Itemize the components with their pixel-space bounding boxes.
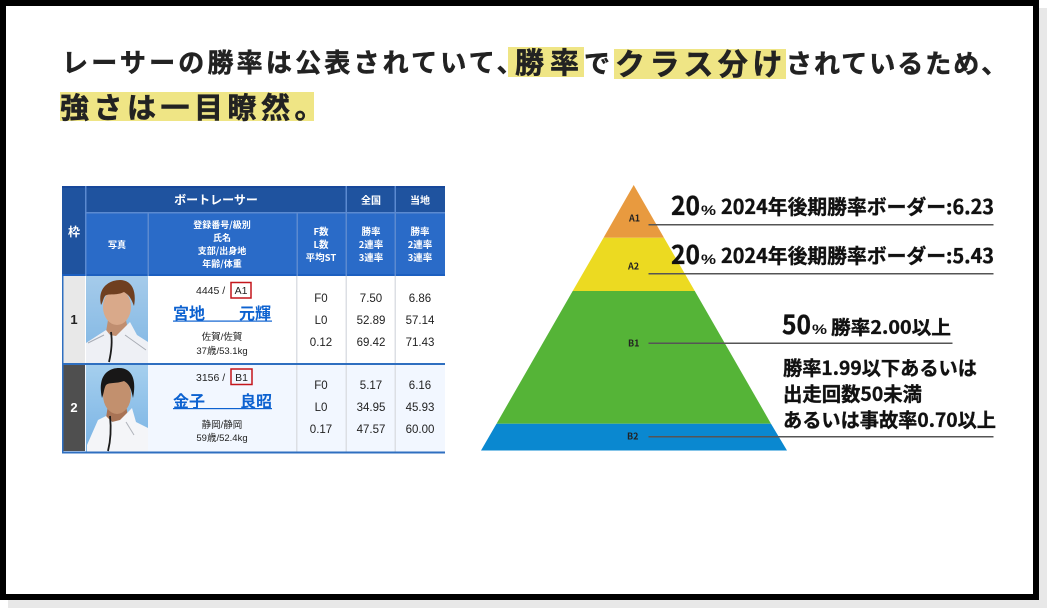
table header: 年齢/体重 xyxy=(202,257,242,270)
racer info 2 xyxy=(173,369,272,444)
title: で xyxy=(584,44,610,81)
row 2 stats: 6.16 xyxy=(409,380,431,392)
label: A1: 2024年後期勝率ボーダー:6.23 xyxy=(721,191,994,220)
row 2 stats xyxy=(310,380,434,436)
table header: 枠 xyxy=(68,223,80,240)
racer info 2: 59歳/52.4kg xyxy=(196,432,248,444)
label: A2: 2024年後期勝率ボーダー:5.43 xyxy=(721,240,994,269)
label: A1: % xyxy=(701,202,717,218)
row 2 stats: 0.17 xyxy=(310,424,332,436)
racer info 1: 4445 / xyxy=(196,285,225,297)
row 2 stats: L0 xyxy=(315,402,327,414)
table header: 2連率 xyxy=(359,237,384,251)
label: B2: 出走回数50未満 xyxy=(783,378,922,407)
row 2 stats: 34.95 xyxy=(357,402,385,414)
row 2 stats: 45.93 xyxy=(406,402,434,414)
title xyxy=(60,40,1009,127)
row 2 stats: F0 xyxy=(314,380,328,392)
row 2 stats: 5.17 xyxy=(360,380,382,392)
row 1 stats: F0 xyxy=(314,293,328,305)
row 2 stats: 60.00 xyxy=(406,424,434,436)
tier labels: A2 xyxy=(627,260,639,272)
table header: 当地 xyxy=(410,192,430,207)
leader lines xyxy=(648,224,994,438)
table header: 3連率 xyxy=(359,250,384,264)
label: B1: 50 xyxy=(782,305,811,342)
racer info 2: B1 xyxy=(235,372,248,384)
table header: 2連率 xyxy=(408,237,433,251)
class pyramid xyxy=(481,185,787,450)
table header: 氏名 xyxy=(213,231,231,244)
racer info 1: A1 xyxy=(235,285,248,297)
row 1 stats: 71.43 xyxy=(406,337,434,349)
row 1 stats: L0 xyxy=(315,315,327,327)
race table xyxy=(62,186,445,454)
table header: 勝率 xyxy=(410,224,430,238)
table header: 支部/出身地 xyxy=(198,244,246,257)
table header: L数 xyxy=(314,237,329,251)
racer info 1: 37歳/53.1kg xyxy=(196,345,248,357)
row 1 stats: 57.14 xyxy=(406,315,435,327)
table header xyxy=(62,186,445,276)
row 1 stats: 0.12 xyxy=(310,337,332,349)
tier B2 xyxy=(481,424,787,450)
label: A1 xyxy=(671,186,994,223)
title: クラス分け xyxy=(615,40,787,84)
racer info 2: 3156 / xyxy=(196,372,225,384)
label: A2: 20 xyxy=(671,235,700,272)
title: レーサーの勝率は公表されていて、 xyxy=(62,43,526,80)
row 1 xyxy=(62,276,445,363)
tier A1 xyxy=(604,185,664,238)
table header: 平均ST xyxy=(306,250,336,264)
row 2: 2 xyxy=(70,400,78,415)
label: B1 xyxy=(782,305,951,342)
label: A2: % xyxy=(701,251,717,267)
racer info 1: 宮地 xyxy=(173,300,205,324)
table header: F数 xyxy=(313,224,329,238)
label: B1: 勝率2.00以上 xyxy=(831,313,951,340)
tier labels: B2 xyxy=(627,430,638,442)
label: A1: 20 xyxy=(671,186,700,223)
table header: 勝率 xyxy=(361,224,381,238)
racer info 2: 静岡/静岡 xyxy=(202,419,242,431)
row 1 stats: 69.42 xyxy=(357,337,385,349)
label: A2 xyxy=(671,235,994,272)
tier labels: A1 xyxy=(628,212,640,224)
racer info 1: 佐賀/佐賀 xyxy=(202,331,242,343)
racer photo 1 xyxy=(86,276,148,363)
tier B1 xyxy=(496,291,771,424)
label: B1: % xyxy=(812,321,828,337)
title: 強さは一目瞭然。 xyxy=(60,85,328,127)
racer info 1: 元輝 xyxy=(239,300,271,324)
table header: 全国 xyxy=(361,192,381,207)
label: B2: 勝率1.99以下あるいは xyxy=(783,352,977,381)
racer photo 2 xyxy=(86,365,148,452)
row 1 stats xyxy=(310,293,435,349)
title: 勝率 xyxy=(515,40,585,82)
row 1: 1 xyxy=(70,312,78,327)
table header: 写真 xyxy=(108,238,126,251)
racer info 2: 良昭 xyxy=(240,388,272,412)
row 1 stats: 7.50 xyxy=(360,293,382,305)
racer info 1 xyxy=(173,282,272,357)
tier A2 xyxy=(573,238,695,291)
label: B2 xyxy=(783,352,996,433)
title: されているため、 xyxy=(786,44,1009,81)
racer info 2: 金子 xyxy=(173,388,205,412)
table header: ボートレーサー xyxy=(174,191,258,208)
table header: 登録番号/級別 xyxy=(193,218,251,231)
table header: 3連率 xyxy=(408,250,433,264)
row 1 stats: 52.89 xyxy=(357,315,385,327)
row 2 stats: 47.57 xyxy=(357,424,385,436)
label: B2: あるいは事故率0.70以上 xyxy=(783,404,996,433)
row 1 stats: 6.86 xyxy=(409,293,431,305)
row 2 xyxy=(62,363,445,453)
tier labels xyxy=(627,212,640,442)
tier labels: B1 xyxy=(628,336,639,350)
